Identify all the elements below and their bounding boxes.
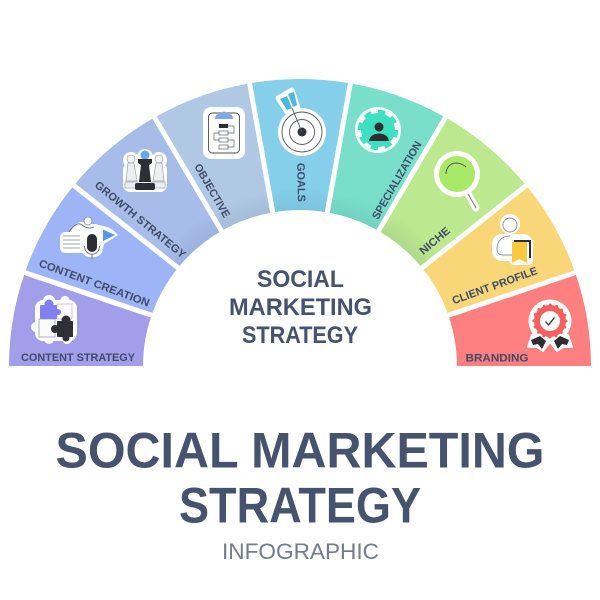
label: niche: NICHE <box>417 225 453 257</box>
center heading: STRATEGY <box>242 322 358 349</box>
icon: puzzle <box>31 295 77 344</box>
icon: client profile <box>492 214 533 265</box>
label: content creation: CONTENT CREATION <box>37 258 151 310</box>
label: objective: OBJECTIVE <box>191 162 232 220</box>
main title: SOCIAL MARKETING <box>56 422 544 478</box>
panel: growth strategy <box>74 118 222 268</box>
label: client profile: CLIENT PROFILE <box>451 265 539 307</box>
panel: specialization <box>327 83 446 231</box>
icon: target with arrow <box>278 90 326 156</box>
label: branding: BRANDING <box>466 352 528 364</box>
icon: magnifier <box>434 151 480 208</box>
subtitle: INFOGRAPHIC <box>222 539 379 564</box>
center heading: SOCIAL <box>257 266 344 293</box>
panel: content creation <box>25 185 178 315</box>
icon: chess pieces <box>123 149 167 192</box>
label: content strategy: CONTENT STRATEGY <box>21 352 136 364</box>
icon: ribbon badge <box>528 300 572 351</box>
panel: goals <box>250 79 350 212</box>
icon: gear with person <box>355 107 401 153</box>
center heading: MARKETING <box>229 294 372 321</box>
center heading <box>229 266 372 349</box>
panel: content strategy <box>9 273 152 366</box>
main title <box>56 422 544 534</box>
panel: branding <box>448 273 591 366</box>
panel: objective <box>154 83 273 231</box>
main title: STRATEGY <box>179 478 421 534</box>
label: goals: GOALS <box>294 163 307 202</box>
label: growth strategy: GROWTH STRATEGY <box>92 179 188 261</box>
semicircle diagram <box>9 79 591 366</box>
panel: client profile <box>422 185 575 315</box>
icon: microphone presentation <box>60 217 118 259</box>
icon: clipboard flow chart <box>203 107 245 159</box>
label: specialization: SPECIALIZATION <box>370 139 425 222</box>
panel: niche <box>378 118 526 268</box>
